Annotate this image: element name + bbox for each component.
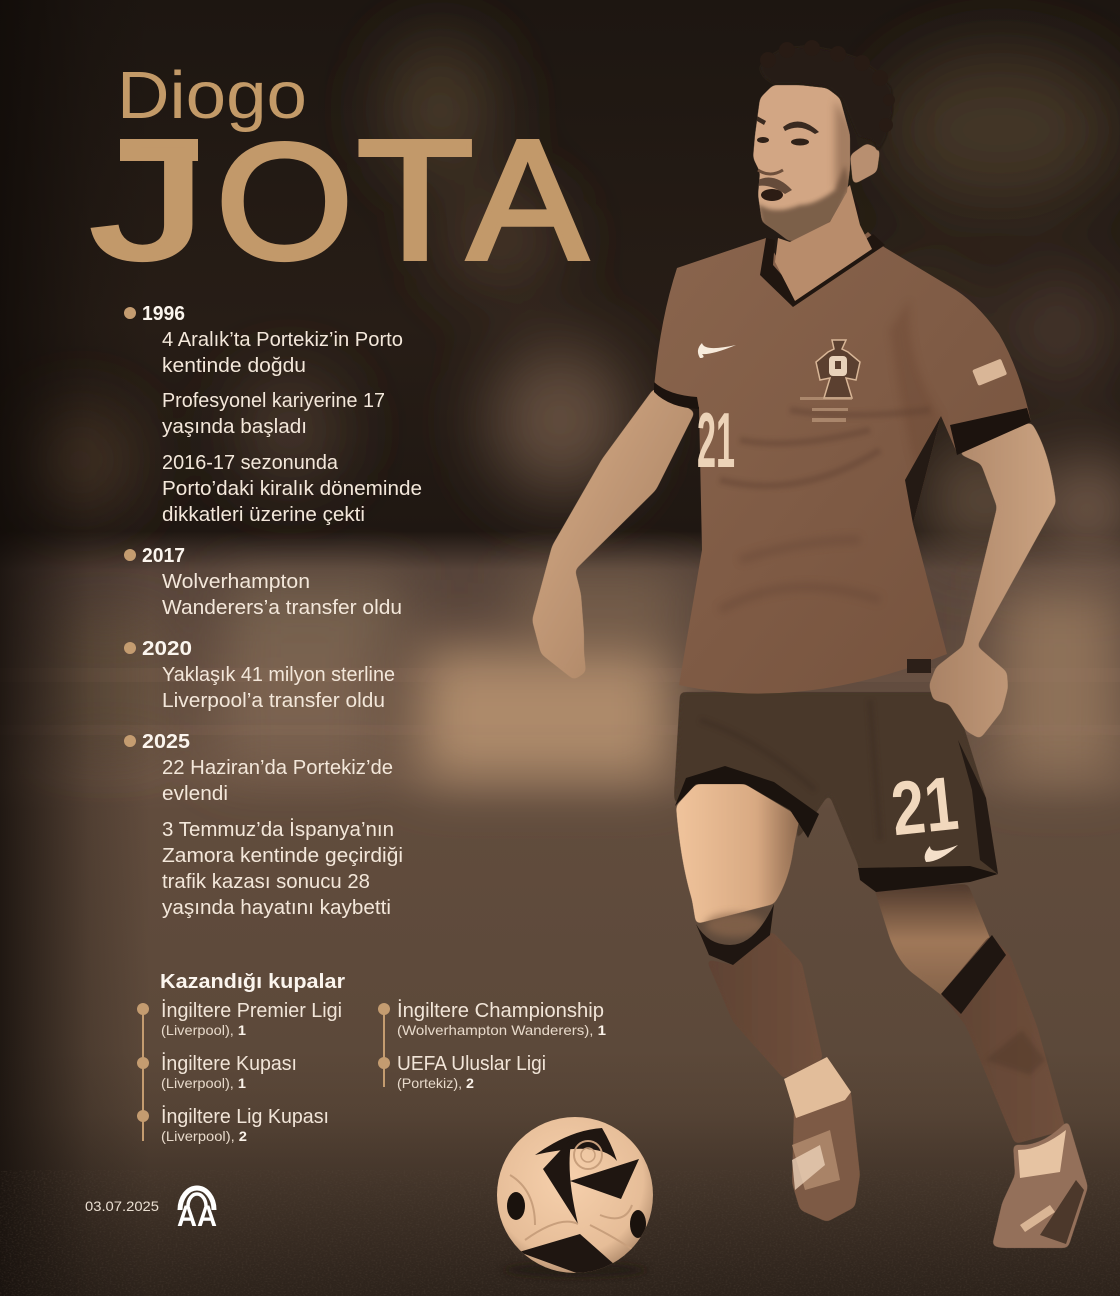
- timeline: [124, 303, 422, 919]
- crest caption: [800, 397, 852, 422]
- timeline: 2017: Wolverhampton: [162, 571, 310, 593]
- shorts: [674, 692, 998, 892]
- shorts swoosh: [925, 845, 958, 862]
- timeline: 1996: dikkatleri üzerine çekti: [162, 504, 365, 526]
- timeline: 2025: 22 Haziran’da Portekiz’de: [162, 757, 393, 779]
- left arm: [532, 388, 695, 680]
- timeline: 1996: 1996: [142, 303, 185, 325]
- timeline: 2025: Zamora kentinde geçirdiği: [162, 845, 403, 867]
- trophies: right column: [378, 999, 606, 1091]
- title: surname: A: [468, 106, 588, 296]
- right leg: [874, 884, 1088, 1248]
- face: [753, 85, 880, 246]
- timeline: 2017: Wanderers’a transfer oldu: [162, 597, 402, 619]
- timeline: 1996: 4 Aralık’ta Portekiz’in Porto: [162, 329, 403, 351]
- icon: AA logo: AA: [177, 1200, 217, 1233]
- timeline: 1996: yaşında başladı: [162, 416, 307, 438]
- timeline: 1996: Profesyonel kariyerine 17: [162, 390, 385, 412]
- right boot: [992, 1120, 1088, 1248]
- title: first name: Diogo: [117, 58, 307, 133]
- trophies: left column: İngiltere Kupası: [161, 1052, 297, 1075]
- trophies: left column: (Liverpool), 1: [161, 1075, 246, 1091]
- trophies: right column: (Wolverhampton Wanderers), 1: [397, 1022, 606, 1038]
- eyes and brows: [757, 116, 766, 125]
- hem patch: [907, 659, 931, 673]
- timeline: 2017: 2017: [142, 545, 185, 567]
- trophies: left column: (Liverpool), 2: [161, 1128, 247, 1144]
- left boot: [784, 1057, 860, 1222]
- timeline: 1996: kentinde doğdu: [162, 355, 306, 377]
- timeline: 2025: trafik kazası sonucu 28: [162, 871, 370, 893]
- player: [532, 40, 1088, 1248]
- timeline: 2025: yaşında hayatını kaybetti: [162, 897, 391, 919]
- title: surname: J: [91, 110, 206, 293]
- timeline: 2020: [124, 638, 395, 712]
- trophies: left column: İngiltere Premier Ligi: [161, 999, 342, 1022]
- shirt: [654, 232, 1031, 694]
- collar: [760, 234, 885, 307]
- shirt swoosh: [698, 343, 736, 358]
- timeline: 2025: 3 Temmuz’da İspanya’nın: [162, 818, 394, 841]
- date: 03.07.2025: [85, 1199, 159, 1214]
- timeline: 2025: evlendi: [162, 783, 228, 805]
- ear: [850, 143, 880, 185]
- ball: [497, 1117, 653, 1277]
- right arm: [929, 422, 1056, 739]
- icon: AA logo: [177, 1188, 217, 1233]
- left leg: [676, 784, 860, 1222]
- beard: [758, 165, 850, 246]
- mouth: [761, 189, 783, 201]
- timeline: 2020: Liverpool’a transfer oldu: [162, 690, 385, 712]
- trophies: right column: UEFA Uluslar Ligi: [397, 1053, 546, 1075]
- timeline: 2020: 2020: [142, 638, 192, 660]
- neck: [775, 185, 872, 301]
- title: [91, 58, 588, 296]
- side shade: [835, 100, 855, 190]
- timeline: 2017: [124, 545, 402, 619]
- nose: [758, 170, 783, 174]
- trophies panel: [137, 971, 606, 1144]
- timeline: 2020: Yaklaşık 41 milyon sterline: [162, 664, 395, 686]
- shirt: 21: [697, 396, 735, 484]
- crest: [816, 340, 860, 398]
- trophies: left column: (Liverpool), 1: [161, 1022, 246, 1038]
- timeline: 2025: [124, 731, 403, 919]
- sleeve patch: [972, 359, 1007, 386]
- trophies heading: Kazandığı kupalar: [160, 971, 345, 993]
- timeline: 1996: Porto’daki kiralık döneminde: [162, 478, 422, 500]
- trophies: right column: İngiltere Championship: [397, 999, 604, 1022]
- title: surname: [91, 106, 588, 296]
- trophies: left column: İngiltere Lig Kupası: [161, 1105, 329, 1128]
- timeline: 1996: 2016-17 sezonunda: [162, 452, 339, 474]
- timeline: 2025: 2025: [142, 731, 190, 753]
- sleeve cuffs: [654, 382, 699, 409]
- trophies: left column: [137, 999, 342, 1144]
- moustache: [758, 178, 792, 194]
- title: surname: T: [357, 106, 474, 296]
- trophies: right column: (Portekiz), 2: [397, 1075, 474, 1091]
- timeline: 1996: [124, 303, 422, 526]
- hair: [758, 40, 895, 155]
- title: surname: O: [216, 110, 353, 293]
- shorts number: 21: [887, 761, 962, 852]
